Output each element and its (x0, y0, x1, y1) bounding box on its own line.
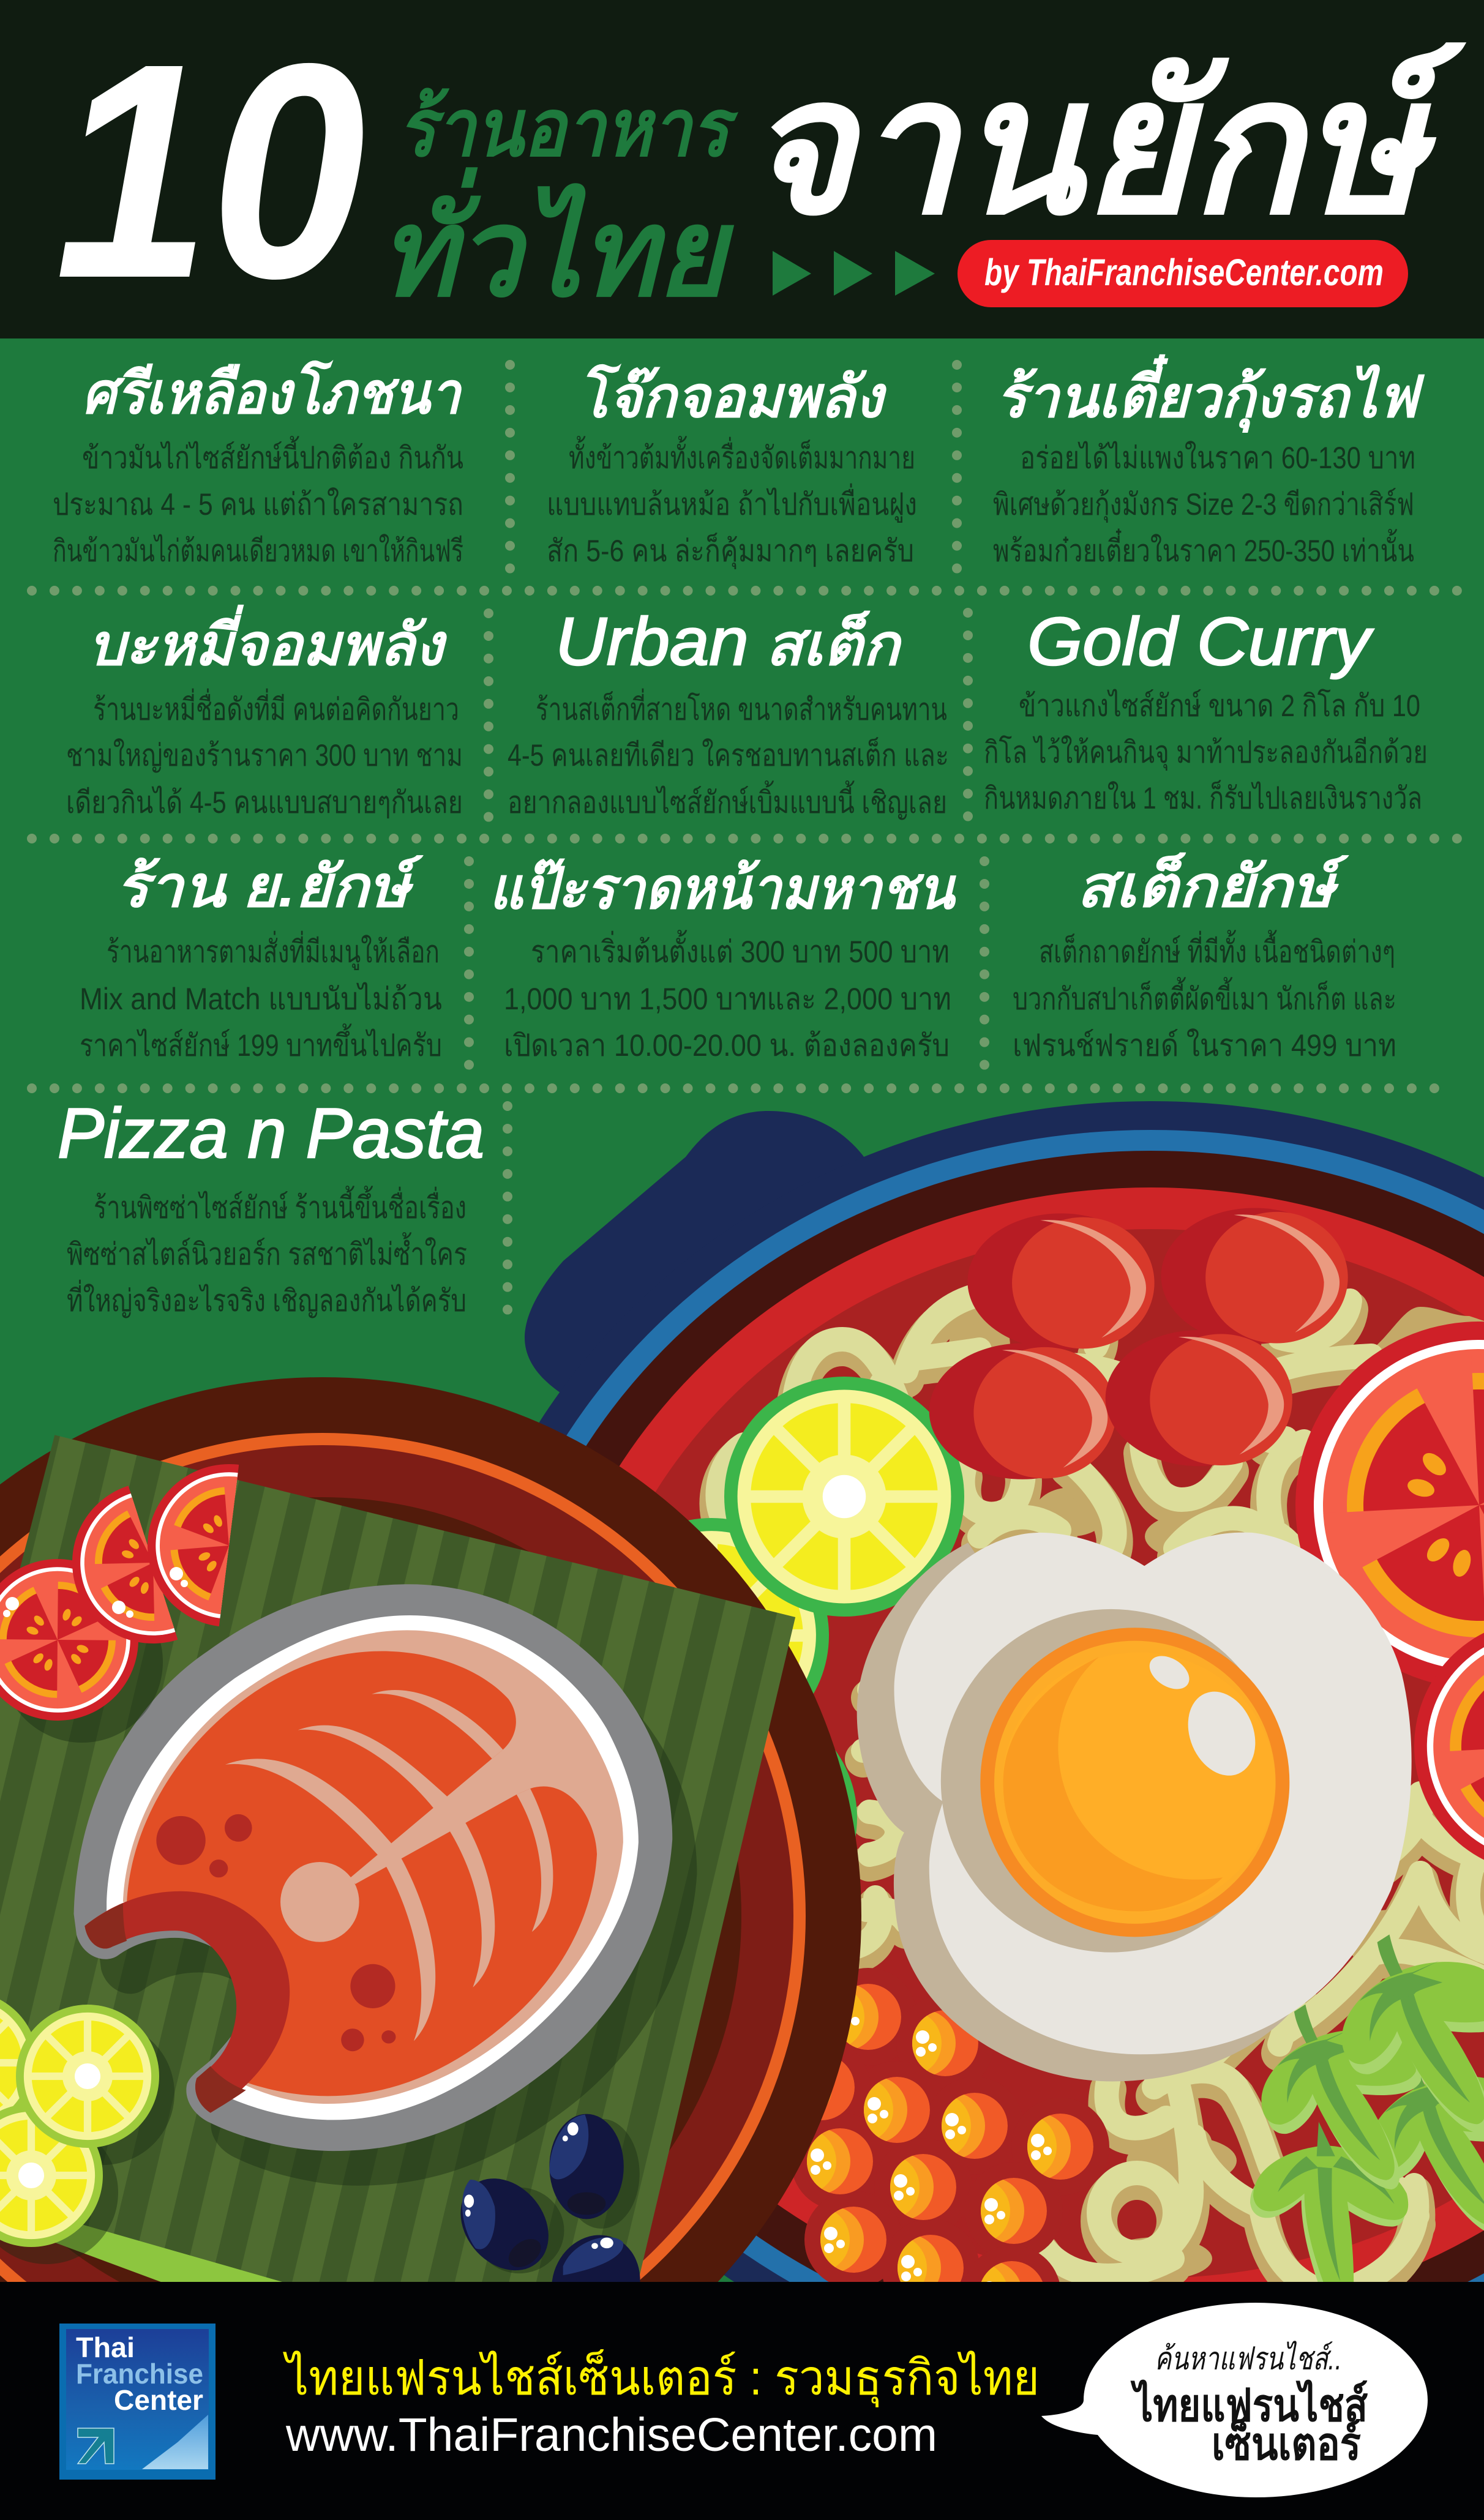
icon: basil leaves (1250, 1934, 1484, 2298)
title: giant plate: จานยักษ์ (746, 40, 1467, 252)
panel: โจ๊กจอมพลัง (547, 363, 917, 569)
text block: 1,000 บาท 1,500 บาทและ 2,000 บาท (504, 982, 951, 1016)
text block: กินข้าวมันไก่ต้มคนเดียวหมด เขาให้กินฟรี (53, 534, 463, 568)
text block (547, 436, 917, 569)
salmon flesh (127, 1651, 597, 2096)
text block (80, 931, 442, 1063)
text block: ร้านพิซซ่าไซส์ยักษ์ ร้านนี้ขึ้นชื่อเรื่อง (94, 1186, 467, 1225)
text block: อยากลองแบบไซส์ยักษ์เบิ้มแบบนี้ เชิญเลย (508, 780, 947, 820)
icon: limes on leaf (0, 1991, 174, 2264)
text block (67, 1186, 467, 1318)
logo: Franchise (76, 2358, 203, 2390)
title: restaurants: ร้านอาหาร (398, 83, 738, 173)
heading: ร้าน ย.ยักษ์ (116, 854, 424, 919)
text block: Mix and Match แบบนับไม่ถ้วน (80, 982, 442, 1016)
text block: ที่ใหญ่จริงอะไรจริง เชิญลองกันได้ครับ (67, 1280, 467, 1318)
logo (59, 2324, 215, 2480)
pan rings (441, 1101, 1484, 2406)
text block: บวกกับสปาเก็ตตี้ผัดขี้เมา นักเก็ต และ (1013, 977, 1396, 1016)
icon: fried egg (857, 1533, 1412, 2081)
panel: Gold Curry (984, 604, 1428, 815)
text block: ร้านอาหารตามสั่งที่มีเมนูให้เลือก (107, 931, 440, 970)
salmon bones (225, 1690, 553, 2041)
heading: แป๊ะราดหน้ามหาชน (489, 856, 956, 921)
arrows (773, 251, 935, 296)
icon: tomato slices right (1253, 1279, 1484, 1903)
heading: บะหมี่จอมพลัง (88, 604, 448, 677)
stem (39, 2224, 306, 2287)
heading: Pizza n Pasta (58, 1094, 484, 1173)
tagline: ไทยแฟรนไชส์เซ็นเตอร์ : รวมธุรกิจไทย (282, 2349, 1040, 2407)
gray dish (74, 1584, 672, 2151)
heading: Gold Curry (1027, 604, 1374, 679)
panel: Urban สเต็ก (508, 604, 949, 820)
panel: ศรีเหลืองโภชนา (53, 359, 463, 568)
panel: สเต็กยักษ์ (1013, 852, 1396, 1063)
text block (504, 930, 951, 1063)
panel: บะหมี่จอมพลัง (66, 604, 463, 820)
icon: back limes (594, 1377, 964, 1934)
salmon skin (123, 1630, 623, 2104)
text block (1013, 930, 1396, 1063)
text block: ร้านบะหมี่ชื่อดังที่มี คนต่อคิดกันยาว (93, 689, 459, 727)
text block (984, 689, 1428, 815)
speech bubble (1041, 2303, 1428, 2497)
fish roe (752, 1968, 1109, 2343)
plate shadow (100, 1714, 697, 2186)
heading: Urban สเต็ก (555, 604, 902, 679)
background green panel (0, 338, 1484, 2285)
byline pill: by ThaiFranchiseCenter.com (984, 252, 1384, 293)
text block: ประมาณ 4 - 5 คน แต่ถ้าใครสามารถ (53, 487, 463, 522)
header bar (0, 0, 1484, 342)
text block: เปิดเวลา 10.00-20.00 น. ต้องลองครับ (504, 1028, 950, 1063)
heading: ร้านเตี๋ยวกุ้งรถไฟ (996, 354, 1425, 433)
text block: ข้าวมันไก่ไซส์ยักษ์นี้ปกติต้อง กินกัน (82, 436, 463, 475)
text block: ราคาไซส์ยักษ์ 199 บาทขึ้นไปครับ (80, 1023, 442, 1063)
title: nationwide: ทั่วไทย (380, 167, 735, 321)
speech bubble: ค้นหาแฟรนไชส์.. (1155, 2341, 1342, 2377)
illustration: front plate with salmon steak on banana leaf (0, 1377, 861, 2282)
text block: ราคาเริ่มต้นตั้งแต่ 300 บาท 500 บาท (531, 930, 950, 969)
salmon spots (156, 1814, 395, 2051)
website url: www.ThaiFranchiseCenter.com (285, 2409, 937, 2461)
salmon belly strip (84, 1891, 290, 2113)
panel: Pizza n Pasta (58, 1094, 484, 1318)
panel: ร้าน ย.ยักษ์ (80, 854, 442, 1063)
sausages (929, 1208, 1348, 1479)
text block (66, 689, 463, 820)
byline pill (957, 240, 1408, 307)
text block: เฟรนช์ฟรายด์ ในราคา 499 บาท (1013, 1028, 1396, 1063)
panel: ร้านเตี๋ยวกุ้งรถไฟ (993, 354, 1425, 568)
icon: tomato slices on leaf (0, 1464, 239, 1743)
footer bar (0, 2282, 1484, 2520)
panel: แป๊ะราดหน้ามหาชน (489, 856, 956, 1063)
text block (53, 436, 463, 568)
text block: พิซซ่าสไตล์นิวยอร์ก รสชาติไม่ซ้ำใคร (67, 1232, 467, 1271)
illustration: back pan with noodles, egg and toppings (441, 1101, 1484, 2406)
banana leaf and salmon (0, 1435, 795, 2353)
speech bubble: ไทยแฟรนไชส์ (1130, 2379, 1368, 2431)
heading: สเต็กยักษ์ (1076, 852, 1350, 919)
speech bubble: เซ็นเตอร์ (1212, 2417, 1361, 2469)
leaf (0, 1435, 795, 2287)
text block: สเต็กถาดยักษ์ ที่มีทั้ง เนื้อชนิดต่างๆ (1039, 930, 1395, 969)
text block: อร่อยได้ไม่แพงในราคา 60-130 บาท (1020, 441, 1415, 475)
text block: เดียวกินได้ 4-5 คนแบบสบายๆกันเลย (66, 785, 463, 820)
text block (993, 441, 1415, 568)
heading: โจ๊กจอมพลัง (577, 363, 887, 429)
title: 10: 10 (55, 0, 365, 342)
text block: ทั้งข้าวต้มทั้งเครื่องจัดเต็มมากมาย (569, 436, 915, 475)
olive shadows (474, 2118, 640, 2273)
pan handle (525, 1111, 918, 1420)
noodles (718, 1295, 1484, 2298)
heading: ศรีเหลืองโภชนา (82, 359, 463, 425)
plate (0, 1377, 861, 2455)
text block: แบบแทบล้นหม้อ ถ้าไปกับเพื่อนฝูง (547, 484, 917, 523)
text block: ร้านสเต็กที่สายโหด ขนาดสำหรับคนทาน (536, 689, 947, 727)
logo: Thai (76, 2331, 135, 2363)
white rim (107, 1615, 639, 2120)
text block: สัก 5-6 คน ล่ะก็คุ้มมากๆ เลยครับ (547, 533, 914, 569)
text block: 4-5 คนเลยทีเดียว ใครชอบทานสเต็ก และ (508, 737, 949, 772)
text block (508, 689, 949, 820)
logo: Center (114, 2384, 203, 2416)
text block: ชามใหญ่ของร้านราคา 300 บาท ชาม (66, 738, 463, 772)
icon: olives (444, 2114, 658, 2353)
